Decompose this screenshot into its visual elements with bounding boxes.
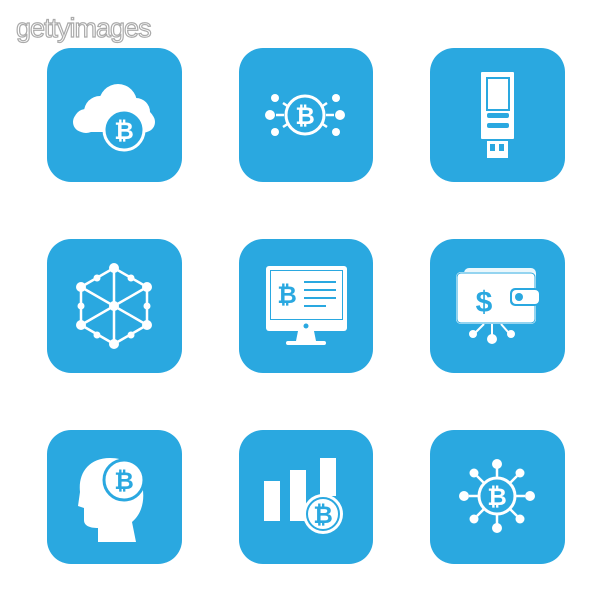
tile: wallet [430,239,565,373]
tile: bitcoin nodes: ₿ [487,484,507,511]
tile: bitcoin network: ₿ [295,103,315,130]
watermark: gettyimages [16,13,151,43]
tile: cloud bitcoin [47,48,182,182]
tile: head bitcoin: ₿ [114,468,134,495]
tile: bitcoin nodes [430,430,565,564]
tile: monitor bitcoin [239,239,373,373]
tile: hexagon network [47,239,182,373]
tile: monitor bitcoin: ₿ [277,282,297,309]
tile: usb drive [430,48,565,182]
tile: bitcoin network [239,48,373,182]
tile: bar chart bitcoin: ₿ [313,502,333,529]
tile: wallet: $ [476,286,493,319]
tile: head bitcoin [47,430,182,564]
tile: bar chart bitcoin [239,430,373,564]
tile: cloud bitcoin: ₿ [114,118,134,145]
